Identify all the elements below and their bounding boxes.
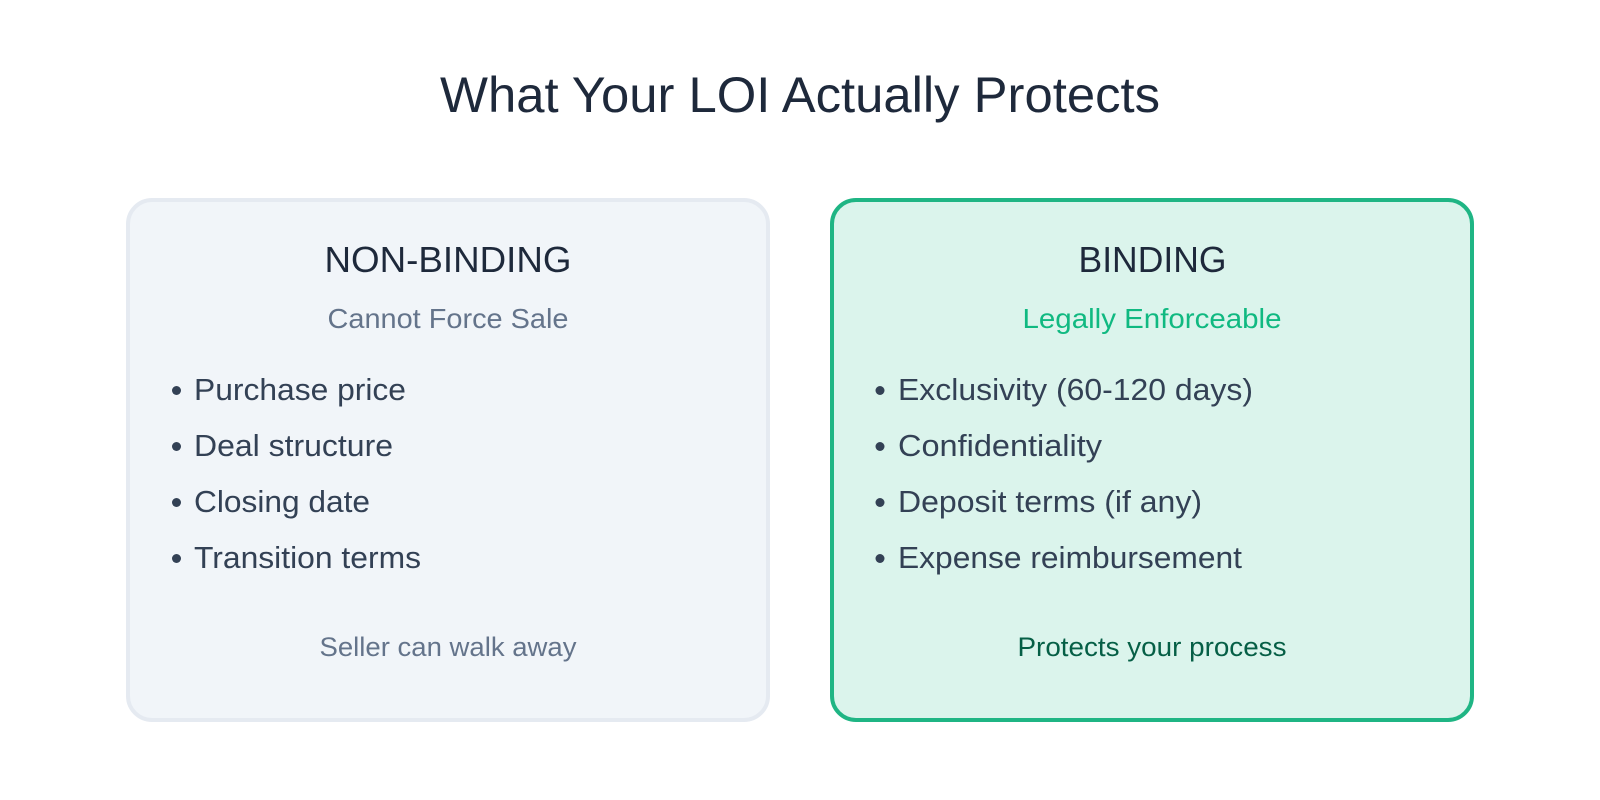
heading: non-binding: NON-BINDING: [324, 239, 572, 280]
list: non-binding terms: Purchase price: [194, 372, 406, 407]
list: binding terms: Expense reimbursement: [898, 540, 1242, 575]
list: binding terms: Deposit terms (if any): [898, 484, 1202, 519]
list: non-binding terms: Deal structure: [194, 428, 393, 463]
list: binding terms: Exclusivity (60-120 days): [898, 372, 1253, 407]
list: non-binding terms: [172, 372, 421, 575]
list: binding terms: [876, 372, 1253, 575]
list: binding terms: Confidentiality: [898, 428, 1103, 463]
footer note: seller can walk away: Seller can walk away: [320, 632, 577, 662]
panel: non-binding: [128, 200, 768, 720]
panel background: non-binding: [128, 200, 768, 720]
footer note: protects your process: Protects your process: [1018, 632, 1286, 662]
list: non-binding terms: Closing date: [194, 484, 370, 519]
panel background: binding: [832, 200, 1472, 720]
title: What Your LOI Actually Protects: [440, 67, 1160, 123]
heading: binding: BINDING: [1078, 239, 1226, 280]
list: non-binding terms: Transition terms: [194, 540, 421, 575]
subheading: cannot force sale: Cannot Force Sale: [328, 303, 568, 334]
subheading: legally enforceable: Legally Enforceable: [1022, 303, 1282, 334]
panel: binding: [832, 200, 1472, 720]
